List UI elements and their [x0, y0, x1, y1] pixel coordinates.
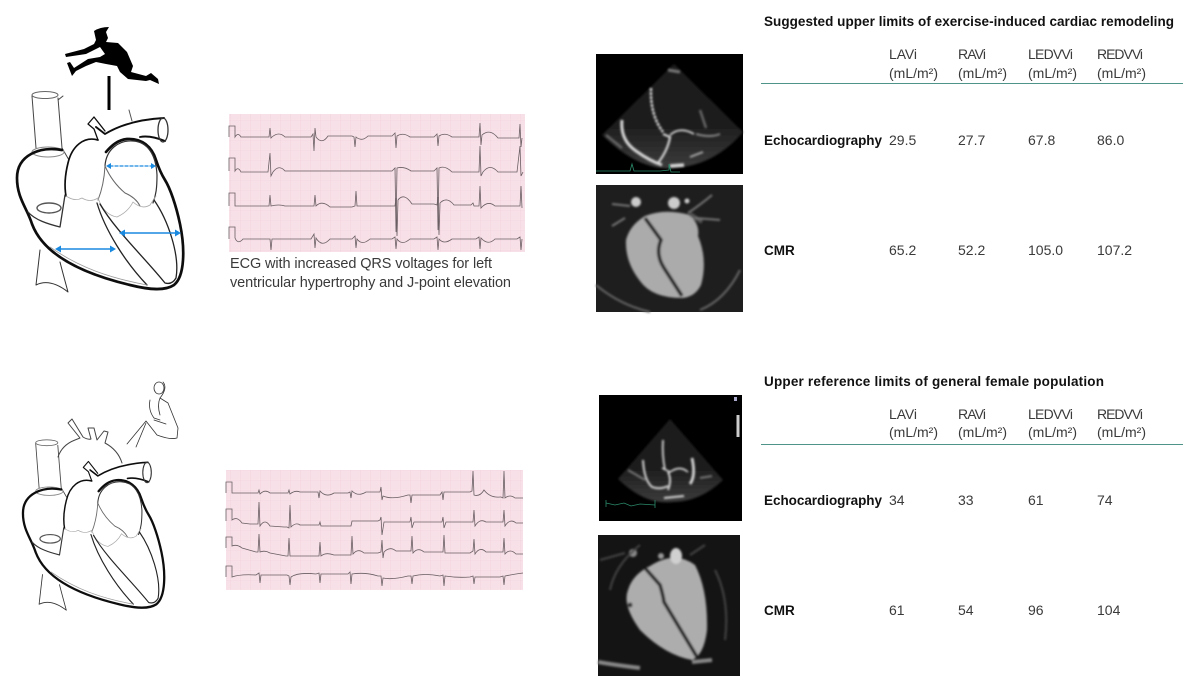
table: upper reference limits: (mL/m²) — [1028, 424, 1077, 440]
table: suggested upper limits: 52.2 — [958, 242, 985, 258]
ECG caption: ECG with increased QRS voltages for left — [230, 256, 492, 272]
table: upper reference limits: 74 — [1097, 492, 1113, 508]
table: upper reference limits: 34 — [889, 492, 905, 508]
table: suggested upper limits: LAVi — [889, 46, 917, 62]
ECG caption: ventricular hypertrophy and J-point elevation — [230, 275, 511, 291]
table: upper reference limits: CMR — [764, 603, 795, 618]
table: suggested upper limits: Echocardiography — [764, 133, 882, 148]
table: upper reference limits: REDVVi — [1097, 406, 1143, 422]
table: suggested upper limits: 105.0 — [1028, 242, 1063, 258]
cardiac MRI: general female population — [598, 535, 740, 676]
table: upper reference limits: Echocardiography — [764, 493, 882, 508]
arrow: left atrial diameter (dashed) — [106, 163, 156, 169]
table: suggested upper limits: 27.7 — [958, 132, 985, 148]
table: upper reference limits: 61 — [1028, 492, 1044, 508]
table: upper reference limits: (mL/m²) — [958, 424, 1007, 440]
ECG strip: athlete — [229, 114, 525, 252]
arrow: right ventricular diameter — [55, 246, 116, 252]
table: upper reference limits: 96 — [1028, 602, 1044, 618]
table: upper reference limits — [761, 374, 1183, 618]
aortic arch and branches — [58, 419, 122, 463]
echocardiogram: general female population — [599, 395, 742, 521]
heart outline — [17, 92, 183, 292]
table: suggested upper limits: 29.5 — [889, 132, 916, 148]
table: suggested upper limits: RAVi — [958, 46, 986, 62]
heart outline — [23, 440, 164, 610]
table: upper reference limits: 104 — [1097, 602, 1121, 618]
table: suggested upper limits: 86.0 — [1097, 132, 1124, 148]
table: suggested upper limits: (mL/m²) — [958, 65, 1007, 81]
table: suggested upper limits: 67.8 — [1028, 132, 1055, 148]
ECG strip: general female population — [226, 470, 523, 590]
table: upper reference limits: LAVi — [889, 406, 917, 422]
echocardiogram: athlete — [596, 54, 743, 174]
table: suggested upper limits — [761, 14, 1183, 258]
athlete heart illustration — [17, 27, 183, 292]
icon: hurdling runner — [65, 27, 159, 110]
table: upper reference limits: (mL/m²) — [1097, 424, 1146, 440]
table: upper reference limits: RAVi — [958, 406, 986, 422]
icon: seated woman sketch — [127, 382, 178, 447]
table: suggested upper limits: 65.2 — [889, 242, 916, 258]
table: upper reference limits: 54 — [958, 602, 974, 618]
arrow: left ventricular diameter — [119, 230, 181, 236]
table: suggested upper limits: (mL/m²) — [1028, 65, 1077, 81]
table: suggested upper limits: LEDVVi — [1028, 46, 1073, 62]
table: upper reference limits: 61 — [889, 602, 905, 618]
table: suggested upper limits: REDVVi — [1097, 46, 1143, 62]
table: upper reference limits: (mL/m²) — [889, 424, 938, 440]
table: upper reference limits: LEDVVi — [1028, 406, 1073, 422]
table: upper reference limits: Upper reference limits of general female population — [764, 374, 1104, 389]
general female population heart illustration — [23, 382, 178, 610]
ECG caption — [230, 256, 511, 291]
table: suggested upper limits: (mL/m²) — [1097, 65, 1146, 81]
table: upper reference limits: 33 — [958, 492, 974, 508]
table: suggested upper limits: (mL/m²) — [889, 65, 938, 81]
table: suggested upper limits: 107.2 — [1097, 242, 1132, 258]
cardiac MRI: athlete — [596, 185, 743, 312]
table: suggested upper limits: Suggested upper limits of exercise-induced cardiac remodeling — [764, 14, 1174, 29]
table: suggested upper limits: CMR — [764, 243, 795, 258]
